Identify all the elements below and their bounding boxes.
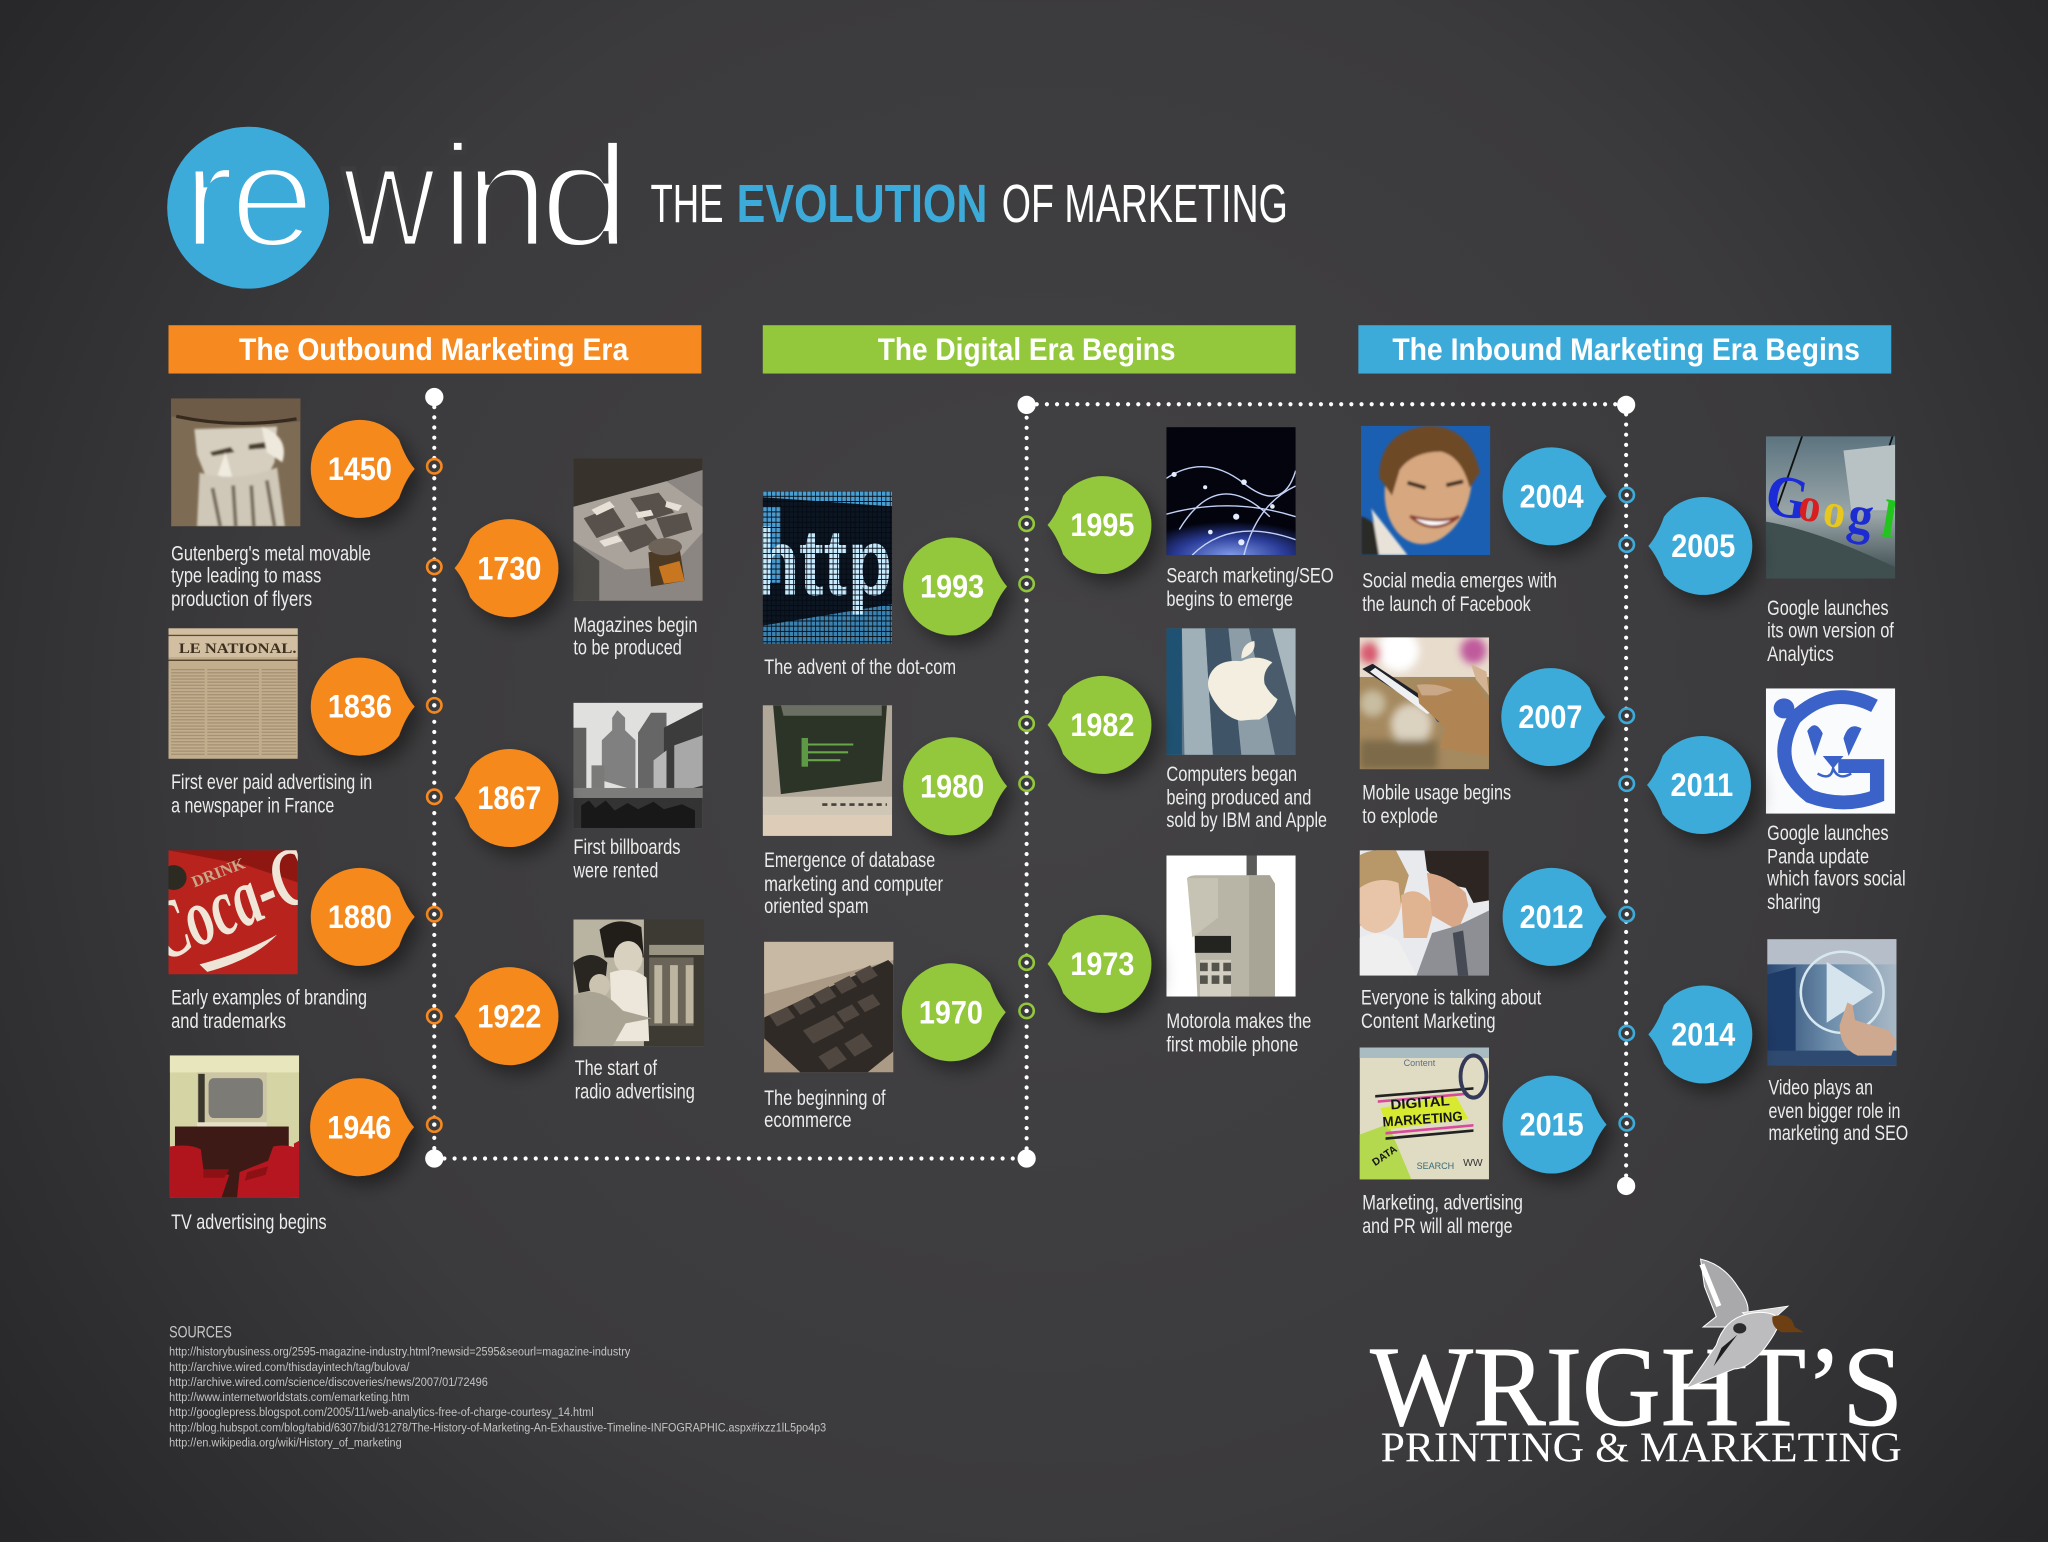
- photo: Apple store logo: [1166, 628, 1296, 755]
- sources: SOURCES: [169, 1323, 232, 1341]
- marker: 1922: [427, 1009, 441, 1023]
- sources: http://en.wikipedia.org/wiki/History_of_marketing: [169, 1436, 402, 1450]
- caption: IBM and Apple: being produced and: [1166, 785, 1311, 810]
- sources: http://blog.hubspot.com/blog/tabid/6307/bid/31278/The-History-of-Marketing-An-Exhaustive-Timeline-INFOGRAPHIC.aspx#ixzz1lL5po4p3: [169, 1421, 826, 1435]
- caption: Analytics: its own version of: [1767, 617, 1895, 642]
- year bubble: 2004: [1503, 447, 1607, 545]
- photo: Coca-Cola sign: DRINK: [189, 854, 248, 891]
- marker: 2014: [1620, 1026, 1634, 1040]
- year bubble: 1980: 1980: [920, 767, 984, 804]
- year bubble: 1450: [311, 420, 415, 518]
- year bubble: 1946: 1946: [327, 1108, 391, 1145]
- title: EVOLUTION: [737, 175, 987, 234]
- marker: 1995: [1019, 517, 1034, 531]
- year bubble: 2007: [1501, 668, 1605, 766]
- caption: ecommerce: The beginning of: [764, 1085, 886, 1110]
- caption: IBM and Apple: Computers began: [1166, 761, 1297, 786]
- caption: content marketing: Content Marketing: [1361, 1008, 1496, 1033]
- caption: Gutenberg: type leading to mass: [171, 563, 321, 588]
- marker: 1982: [1019, 716, 1034, 731]
- caption: IBM and Apple: sold by IBM and Apple: [1166, 807, 1327, 832]
- photo: Google sign: g: [1844, 484, 1878, 547]
- year bubble: 1993: [903, 537, 1007, 635]
- caption: newspaper: a newspaper in France: [171, 792, 334, 817]
- caption: billboards: [573, 834, 680, 883]
- caption: content marketing: Everyone is talking about: [1361, 984, 1541, 1009]
- photo: Gutenberg portrait: [171, 398, 300, 526]
- photo: printing type case: [574, 458, 703, 601]
- caption: merge: and PR will all merge: [1362, 1213, 1512, 1238]
- photo: digital marketing collage: [1360, 1048, 1489, 1180]
- year bubble: 1995: 1995: [1070, 506, 1134, 543]
- caption: Facebook: the launch of Facebook: [1362, 591, 1531, 616]
- year bubble: 1973: [1048, 915, 1151, 1013]
- logo: Wright's Printing & Marketing: [1370, 1259, 1903, 1472]
- year bubble: 1982: 1982: [1070, 706, 1134, 743]
- logo: rewind: e: [230, 114, 315, 277]
- photo: Motorola brick phone: [1166, 856, 1296, 997]
- caption: video: even bigger role in: [1768, 1098, 1900, 1123]
- marker: 2004: [1620, 488, 1634, 502]
- caption: magazines: Magazines begin: [573, 612, 697, 637]
- caption: Analytics: Analytics: [1767, 641, 1834, 666]
- year bubble: 2011: 2011: [1671, 766, 1733, 803]
- photo: digital marketing collage: WW: [1463, 1158, 1483, 1169]
- caption: Facebook: [1362, 568, 1557, 616]
- caption: merge: Marketing, advertising: [1362, 1189, 1523, 1214]
- marker: 2007: [1620, 709, 1634, 723]
- caption: magazines: to be produced: [573, 634, 682, 659]
- photo: Le National newspaper: [168, 628, 298, 759]
- year bubble: 2007: 2007: [1518, 698, 1582, 735]
- title: [650, 175, 1288, 234]
- photo: Google sign: l: [1878, 490, 1901, 551]
- heading: The Outbound Marketing Era: The Outbound Marketing Era: [239, 332, 629, 367]
- logo: rewind: d: [539, 114, 631, 277]
- photo: digital marketing collage: MARKETING: [1382, 1109, 1463, 1130]
- year bubble: 1730: [455, 519, 558, 617]
- year bubble: 1980: [903, 737, 1007, 835]
- marker: 1980: [1019, 776, 1034, 791]
- caption: SEO: Search marketing/SEO: [1166, 563, 1334, 588]
- year bubble: 1995: [1048, 476, 1151, 574]
- photo: digital marketing collage: DIGITAL: [1390, 1093, 1450, 1113]
- marker: 2015: [1620, 1116, 1634, 1130]
- caption: trademarks: [171, 984, 367, 1033]
- marker: 1946: [427, 1117, 441, 1132]
- panel: outbound era timeline: [133, 398, 704, 1234]
- logo: Wright's Printing & Marketing: PRINTING & MARKETING: [1381, 1426, 1902, 1472]
- caption: ecommerce: ecommerce: [764, 1107, 852, 1132]
- caption: content marketing: [1361, 984, 1541, 1033]
- caption: merge: [1362, 1189, 1523, 1238]
- caption: video: marketing and SEO: [1768, 1120, 1908, 1145]
- photo: New York billboards: [573, 702, 703, 828]
- year bubble: 2014: 2014: [1671, 1016, 1735, 1053]
- year bubble: 1970: [902, 963, 1006, 1061]
- title: THE: [650, 175, 724, 234]
- sources: http://historybusiness.org/2595-magazine-industry.html?newsid=2595&seourl=magazine-industry: [169, 1345, 631, 1359]
- heading: The Inbound Marketing Era Begins: [1358, 325, 1891, 374]
- year bubble: 1973: 1973: [1070, 945, 1134, 982]
- year bubble: 1450: 1450: [328, 450, 392, 487]
- year bubble: 2005: 2005: [1671, 527, 1735, 564]
- photo: Google sign: o: [1795, 477, 1825, 533]
- year bubble: 1867: 1867: [477, 779, 541, 816]
- heading: The Digital Era Begins: [763, 325, 1296, 374]
- caption: database: marketing and computer: [764, 871, 943, 896]
- photo: Google sign: G: [1761, 461, 1813, 534]
- caption: Gutenberg: production of flyers: [171, 586, 312, 611]
- year bubble: 1867: [455, 749, 558, 847]
- photo: database computer: [762, 705, 892, 836]
- heading: The Digital Era Begins: The Digital Era Begins: [878, 332, 1176, 367]
- photo: digital marketing collage: Content: [1404, 1058, 1436, 1068]
- marker: 1867: [427, 790, 441, 804]
- photo: family at radio: [573, 920, 704, 1046]
- marker: 2011: [1620, 776, 1634, 791]
- sources: [169, 1323, 826, 1450]
- year bubble: 2012: 2012: [1520, 898, 1584, 935]
- panel: digital era timeline: [755, 427, 1334, 1132]
- caption: magazines: [573, 612, 697, 659]
- year bubble: 2004: 2004: [1520, 477, 1584, 514]
- caption: IBM and Apple: [1166, 761, 1327, 832]
- photo: mobile phone in hand: [1360, 637, 1489, 770]
- caption: Analytics: [1767, 595, 1895, 666]
- heading: The Outbound Marketing Era: [168, 325, 701, 374]
- photo: network globe: [1166, 427, 1296, 556]
- photo: video play button: [1767, 939, 1896, 1066]
- logo: rewind: i: [441, 114, 474, 277]
- photo: http screen: [755, 491, 892, 644]
- caption: Motorola: first mobile phone: [1166, 1031, 1298, 1056]
- caption: billboards: First billboards: [573, 834, 680, 859]
- caption: newspaper: First ever paid advertising in: [171, 769, 372, 794]
- caption: ecommerce: [764, 1085, 886, 1132]
- caption: video: Video plays an: [1768, 1075, 1873, 1100]
- photo: Facebook founder portrait: [1361, 426, 1490, 556]
- marker: 1836: [427, 698, 441, 712]
- panel: inbound era timeline: [1360, 418, 1908, 1238]
- photo: Le National newspaper: LE NATIONAL.: [179, 641, 297, 657]
- year bubble: 2005: [1648, 497, 1752, 595]
- year bubble: 1880: [311, 868, 415, 966]
- year bubble: 1982: [1048, 676, 1151, 774]
- logo: rewind: [167, 114, 631, 289]
- caption: Panda: which favors social: [1766, 866, 1906, 891]
- caption: database: oriented spam: [764, 893, 869, 918]
- photo: vintage TV and chairs: [170, 1055, 300, 1198]
- caption: mobile: [1362, 779, 1511, 828]
- marker: 1730: [427, 560, 441, 574]
- caption: video: [1768, 1075, 1908, 1145]
- photo: digital marketing collage: DATA: [1371, 1144, 1400, 1169]
- year bubble: 2011: [1647, 736, 1751, 834]
- title: OF MARKETING: [1002, 175, 1288, 234]
- caption: radio: radio advertising: [575, 1078, 695, 1103]
- year bubble: 2015: [1503, 1076, 1607, 1174]
- caption: mobile: to explode: [1362, 803, 1438, 828]
- caption: Panda: sharing: [1767, 889, 1821, 914]
- sources: http://archive.wired.com/thisdayintech/tag/bulova/: [169, 1360, 410, 1374]
- caption: Panda: Panda update: [1767, 843, 1869, 868]
- year bubble: 1993: 1993: [920, 568, 984, 605]
- year bubble: 1730: 1730: [477, 549, 541, 586]
- caption: radio: [575, 1055, 695, 1103]
- photo: Google sign: [1761, 436, 1901, 578]
- heading: The Inbound Marketing Era Begins: The Inbound Marketing Era Begins: [1392, 332, 1860, 367]
- caption: Analytics: Google launches: [1767, 595, 1889, 620]
- year bubble: 1922: 1922: [477, 997, 541, 1034]
- marker: 1970: [1019, 1004, 1034, 1018]
- year bubble: 1970: 1970: [919, 993, 983, 1030]
- caption: SEO: [1166, 563, 1334, 611]
- logo: rewind: r: [182, 114, 234, 277]
- caption: mobile: Mobile usage begins: [1362, 779, 1511, 804]
- year bubble: 1880: 1880: [328, 898, 392, 935]
- caption: newspaper: [171, 769, 372, 817]
- caption: Panda: Google launches: [1767, 820, 1889, 845]
- sources: http://www.internetworldstats.com/emarketing.htm: [169, 1390, 409, 1404]
- year bubble: 2014: [1648, 985, 1752, 1083]
- caption: radio: The start of: [575, 1055, 658, 1080]
- photo: Google Panda logo: [1766, 688, 1896, 814]
- logo: rewind: n: [465, 114, 549, 277]
- marker: 1993: [1019, 577, 1034, 591]
- year bubble: 1922: [455, 967, 558, 1065]
- caption: TV: TV advertising begins: [171, 1209, 327, 1234]
- year bubble: 1836: 1836: [328, 688, 392, 725]
- marker: 1450: [427, 459, 441, 473]
- year bubble: 1946: [310, 1078, 414, 1176]
- caption: trademarks: Early examples of branding: [171, 984, 367, 1009]
- marker: 1880: [427, 907, 441, 921]
- marker: 2005: [1620, 537, 1634, 552]
- caption: billboards: were rented: [573, 858, 658, 883]
- caption: Motorola: [1166, 1008, 1311, 1056]
- caption: SEO: begins to emerge: [1166, 586, 1293, 611]
- caption: Gutenberg: Gutenberg's metal movable: [171, 540, 371, 565]
- marker: 2012: [1620, 907, 1634, 921]
- sources: http://archive.wired.com/science/discoveries/news/2007/01/72496: [169, 1375, 488, 1389]
- year bubble: 1836: [311, 658, 415, 756]
- timeline: dotted path: [425, 388, 1635, 1195]
- icon: flying duck: [1686, 1259, 1804, 1388]
- caption: Facebook: Social media emerges with: [1362, 568, 1557, 593]
- logo: Wright's Printing & Marketing: WRIGHT’S: [1370, 1323, 1903, 1450]
- caption: dot-com: The advent of the dot-com: [764, 654, 956, 679]
- caption: database: [764, 847, 943, 918]
- sources: http://googlepress.blogspot.com/2005/11/web-analytics-free-of-charge-courtesy_14.html: [169, 1405, 594, 1419]
- year bubble: 2015: 2015: [1520, 1106, 1584, 1143]
- caption: Gutenberg: [171, 540, 371, 611]
- photo: people whispering: [1360, 850, 1489, 976]
- caption: database: Emergence of database: [764, 847, 935, 872]
- photo: vintage keyboard: [764, 942, 894, 1072]
- marker: 1973: [1019, 955, 1034, 970]
- caption: Motorola: Motorola makes the: [1166, 1008, 1311, 1033]
- caption: trademarks: and trademarks: [171, 1008, 286, 1033]
- photo: Google sign: o: [1820, 482, 1850, 539]
- logo: rewind: w: [342, 114, 436, 277]
- photo: digital marketing collage: SEARCH: [1417, 1161, 1454, 1171]
- caption: Panda: [1766, 820, 1906, 914]
- year bubble: 2012: [1503, 868, 1607, 966]
